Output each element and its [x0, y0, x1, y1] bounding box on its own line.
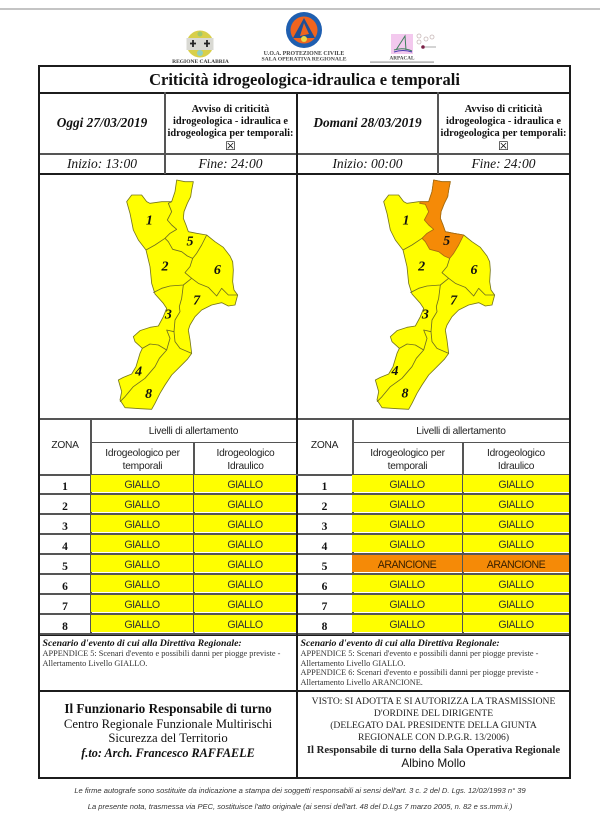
today zone 3: 3	[62, 521, 68, 533]
table today: column 1 heading	[105, 448, 180, 472]
today zone 2: GIALLO	[124, 499, 160, 511]
table tomorrow: column 1 heading: Idrogeologico per	[370, 448, 445, 459]
tomorrow zone 4: GIALLO	[389, 539, 425, 551]
today zone 3: GIALLO	[227, 519, 263, 531]
logo: ARPACAL: ARPACAL	[390, 56, 415, 62]
tomorrow zone 4: 4	[322, 541, 327, 553]
tomorrow zone 2: GIALLO	[389, 499, 425, 511]
signature: authorization: REGIONALE CON D.P.G.R. 13/2006)	[358, 732, 509, 743]
map: today: 1	[146, 214, 153, 229]
tomorrow zone 2: 2	[322, 501, 327, 513]
today zone 6: GIALLO	[124, 579, 160, 591]
today zone 7: GIALLO	[227, 599, 263, 611]
scenario tomorrow	[300, 638, 538, 687]
signature: authorization: VISTO: SI ADOTTA E SI AUTORIZZA LA TRASMISSIONE	[312, 696, 555, 707]
top rule	[0, 8, 600, 10]
tomorrow zone 5: ARANCIONE	[487, 559, 545, 571]
signature: authorization: D'ORDINE DEL DIRIGENTE	[374, 708, 493, 719]
tomorrow end: Fine: 24:00	[471, 156, 536, 171]
scenario today body	[42, 649, 280, 668]
scenario today body: APPENDICE 5: Scenari d'evento e possibili danni per piogge previste -	[42, 649, 280, 658]
today zone 1: GIALLO	[227, 479, 263, 491]
scenario today heading: Scenario d'evento di cui alla Direttiva Regionale:	[42, 638, 242, 649]
logo: Protezione Civile: U.O.A. PROTEZIONE CIVILE	[264, 51, 344, 57]
tomorrow zone 6: GIALLO	[389, 579, 425, 591]
today zone 7	[40, 595, 296, 615]
scenario tomorrow body: Allertamento Livello GIALLO.	[300, 659, 405, 668]
scenario tomorrow body: Allertamento Livello ARANCIONE.	[300, 678, 423, 687]
today zone 5: 5	[62, 561, 68, 573]
map: tomorrow: 6	[470, 263, 478, 278]
tomorrow zone 8	[298, 615, 569, 635]
tomorrow zone 1	[298, 475, 569, 495]
signature: functionary: Sicurezza del Territorio	[108, 731, 228, 745]
header: tomorrow notice	[440, 104, 566, 153]
scenario tomorrow body: APPENDICE 5: Scenari d'evento e possibili danni per piogge previste -	[300, 649, 538, 658]
table today: column 2 heading: Idraulico	[227, 461, 264, 472]
map: tomorrow: 1	[402, 213, 410, 228]
today zone 5: GIALLO	[227, 559, 263, 571]
header: today notice: Avviso di criticità	[192, 104, 269, 115]
table today: column 2 heading	[217, 448, 274, 472]
scenario today	[42, 638, 280, 668]
tomorrow zone 2: GIALLO	[498, 499, 534, 511]
signature: authorization: Albino Mollo	[401, 756, 466, 770]
today zone 4: GIALLO	[124, 539, 160, 551]
today zone 8: GIALLO	[227, 619, 263, 631]
map: today: 5	[186, 234, 194, 249]
table tomorrow: column 2 heading: Idraulico	[498, 461, 534, 472]
table today: zone heading: ZONA	[51, 440, 79, 451]
tomorrow zone 6: 6	[322, 581, 327, 593]
map: tomorrow: 2	[417, 260, 425, 275]
map: today	[118, 180, 238, 410]
tomorrow zone 7: 7	[322, 601, 327, 613]
today zone 2	[40, 495, 296, 515]
map: today: 6	[214, 263, 221, 278]
map: tomorrow: 3	[421, 307, 429, 322]
map: tomorrow: 8	[402, 387, 408, 402]
signature: authorization: (DELEGATO DAL PRESIDENTE DELLA GIUNTA	[330, 720, 537, 731]
table tomorrow: column 1 heading: temporali	[388, 461, 427, 472]
tomorrow zone 2	[298, 495, 569, 515]
map: today: 8	[145, 387, 152, 402]
today zone 1	[40, 475, 296, 495]
logo: Regione Calabria	[172, 30, 229, 64]
today zone 1: GIALLO	[124, 479, 160, 491]
map: today: 2	[160, 260, 168, 275]
table tomorrow: levels heading: Livelli di allertamento	[416, 426, 506, 437]
table today: column 1 heading: Idrogeologico per	[105, 448, 180, 459]
scenario tomorrow heading: Scenario d'evento di cui alla Direttiva Regionale:	[300, 638, 500, 649]
tomorrow zone 8: GIALLO	[389, 619, 425, 631]
main frame	[38, 65, 570, 779]
today zone 6: GIALLO	[227, 579, 263, 591]
map: today: 3	[164, 308, 172, 323]
map: tomorrow	[374, 180, 496, 410]
signature: functionary: Centro Regionale Funzionale Multirischi	[64, 717, 272, 731]
tomorrow zone 4	[298, 535, 569, 555]
today zone 3	[40, 515, 296, 535]
today zone 4	[40, 535, 296, 555]
today zone 6: 6	[62, 581, 68, 593]
signature: functionary	[64, 701, 272, 760]
tomorrow zone 3: GIALLO	[498, 519, 534, 531]
today zone 4: 4	[62, 541, 68, 553]
header: tomorrow notice: Avviso di criticità	[465, 104, 542, 115]
today zone 6	[40, 575, 296, 595]
today start: Inizio: 13:00	[67, 156, 137, 171]
today zone 8	[40, 615, 296, 635]
tomorrow start: Inizio: 00:00	[332, 156, 403, 171]
table tomorrow: column 2 heading	[487, 448, 545, 472]
header: tomorrow date: Domani 28/03/2019	[313, 115, 422, 130]
map: today: 4	[134, 364, 142, 379]
footer note 2: La presente nota, trasmessa via PEC, sostituisce l'atto originale (ai sensi dell'art. 48 del D.Lgs 7 marzo 2005, n. 82 e ss.mm.ii.)	[88, 802, 512, 811]
scenario today body: Allertamento Livello GIALLO.	[42, 659, 147, 668]
today rows	[40, 475, 296, 635]
title: Criticità idrogeologica-idraulica e temporali	[149, 70, 460, 89]
tomorrow zone 1: GIALLO	[498, 479, 534, 491]
logo: ARPACAL	[370, 34, 436, 63]
map: today: 7	[193, 294, 201, 309]
zone 5 orange	[420, 180, 464, 258]
header: tomorrow notice: idrogeologica per temporali:	[440, 128, 566, 139]
today zone 8: GIALLO	[124, 619, 160, 631]
header: tomorrow notice: idrogeologica - idraulica e	[446, 116, 561, 127]
table today: column 2 heading: Idrogeologico	[217, 448, 274, 459]
tomorrow zone 8: GIALLO	[498, 619, 534, 631]
table today: column 1 heading: temporali	[123, 461, 162, 472]
signature: authorization: Il Responsabile di turno della Sala Operativa Regionale	[307, 744, 560, 756]
scenario tomorrow body: APPENDICE 6: Scenari d'evento e possibili danni per piogge previste -	[300, 668, 538, 677]
map: tomorrow: 5	[443, 234, 450, 249]
tomorrow zone 1: GIALLO	[389, 479, 425, 491]
table tomorrow: column 1 heading	[370, 448, 445, 472]
header: today notice	[167, 104, 294, 153]
tomorrow zone 6: GIALLO	[498, 579, 534, 591]
header: today notice: ☒	[225, 139, 236, 153]
map: tomorrow: 4	[390, 364, 398, 379]
header: today date: Oggi 27/03/2019	[57, 115, 147, 130]
header: tomorrow notice: ☒	[498, 139, 509, 153]
tomorrow zone 7	[298, 595, 569, 615]
tomorrow zone 3: 3	[322, 521, 327, 533]
tomorrow zone 7: GIALLO	[389, 599, 425, 611]
footer note 1: Le firme autografe sono sostituite da indicazione a stampa dei soggetti responsabili ai sensi dell'art. 3 c. 2 del D. Lgs. 12/02/1993 n° 39	[74, 786, 526, 795]
tomorrow zone 4: GIALLO	[498, 539, 534, 551]
today zone 3: GIALLO	[124, 519, 160, 531]
map: tomorrow: 7	[450, 294, 458, 309]
today zone 7: GIALLO	[124, 599, 160, 611]
table tomorrow: column 2 heading: Idrogeologico	[487, 448, 545, 459]
header: today notice: idrogeologica per temporali:	[167, 128, 294, 139]
today zone 4: GIALLO	[227, 539, 263, 551]
signature: authorization	[307, 696, 560, 770]
today zone 1: 1	[62, 481, 68, 493]
header: today notice: idrogeologica - idraulica e	[173, 116, 288, 127]
tomorrow zone 3	[298, 515, 569, 535]
signature: functionary: Il Funzionario Responsabile di turno	[64, 701, 272, 716]
tomorrow zone 3: GIALLO	[389, 519, 425, 531]
tomorrow zone 1: 1	[322, 481, 327, 493]
today zone 2: 2	[62, 501, 68, 513]
tomorrow zone 5: 5	[322, 561, 327, 573]
tomorrow zone 6	[298, 575, 569, 595]
tomorrow zone 8: 8	[322, 621, 327, 633]
today zone 7: 7	[62, 601, 68, 613]
today zone 2: GIALLO	[227, 499, 263, 511]
tomorrow zone 5: ARANCIONE	[378, 559, 436, 571]
today zone 5	[40, 555, 296, 575]
table tomorrow: zone heading: ZONA	[311, 440, 338, 451]
tomorrow zone 5	[298, 555, 569, 575]
scenario tomorrow body	[300, 649, 538, 687]
table today: levels heading: Livelli di allertamento	[149, 426, 238, 437]
today end: Fine: 24:00	[198, 156, 263, 171]
today zone 5: GIALLO	[124, 559, 160, 571]
today zone 8: 8	[62, 621, 68, 633]
logo: Protezione Civile	[261, 12, 347, 62]
signature: functionary: f.to: Arch. Francesco RAFFAELE	[81, 746, 255, 760]
tomorrow zone 7: GIALLO	[498, 599, 534, 611]
tomorrow rows	[298, 475, 569, 635]
